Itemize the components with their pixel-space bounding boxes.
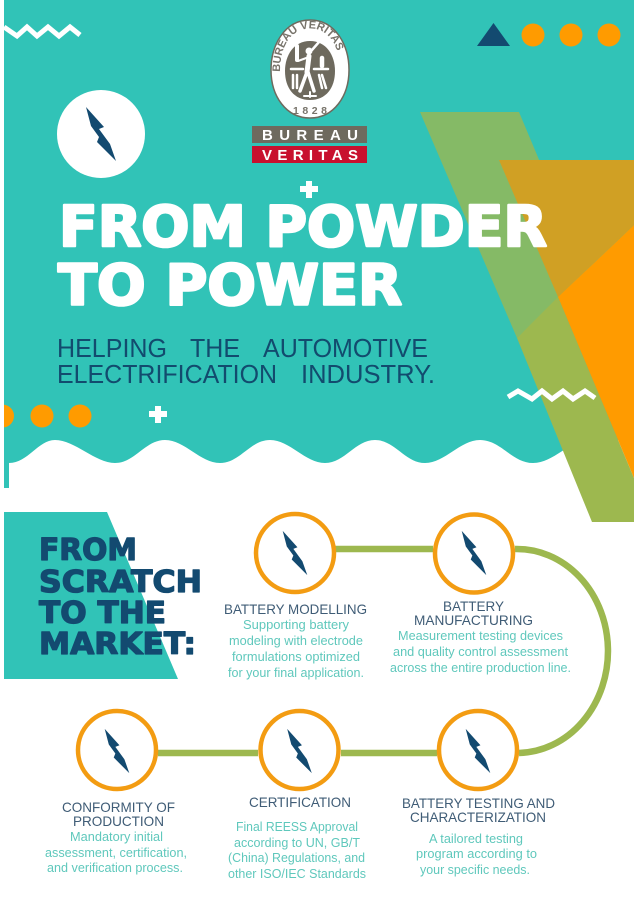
description: battery manufacturing: and quality control assessment — [393, 644, 568, 659]
subtitle — [57, 333, 435, 389]
title: TO POWER — [58, 254, 402, 318]
description: certification — [228, 819, 366, 881]
label: battery testing and characterization: CHARACTERIZATION — [410, 809, 546, 825]
label: battery testing and characterization: BATTERY TESTING AND — [402, 795, 555, 811]
step: battery testing and characterization — [402, 711, 555, 877]
description: battery testing: program according to — [416, 846, 537, 861]
logo seal — [270, 19, 350, 119]
decorative zigzag right — [508, 391, 595, 399]
icon: plus above title — [300, 181, 318, 198]
description: conformity of production: and verification process. — [47, 860, 183, 875]
logo wordmark band BUREAU: BUREAU — [262, 127, 358, 144]
description: battery manufacturing: Measurement testing devices — [398, 628, 563, 643]
title: FROM POWDER — [59, 195, 547, 260]
description: certification: according to UN, GB/T — [234, 835, 360, 850]
section heading — [39, 533, 202, 662]
label: battery manufacturing — [414, 598, 533, 628]
logo: Bureau Veritas — [252, 19, 367, 164]
icons: three orange dots top right — [522, 24, 620, 46]
logo seal: BUREAU VERITAS — [272, 20, 344, 72]
label: conformity of production: PRODUCTION — [73, 813, 164, 829]
subtitle: HELPING — [57, 333, 167, 363]
icon: navy triangle — [477, 23, 510, 46]
label: battery manufacturing: BATTERY — [443, 598, 505, 614]
description: battery manufacturing — [390, 628, 571, 675]
description: conformity of production: Mandatory initial — [70, 829, 163, 844]
icons: three orange dots left — [4, 404, 92, 428]
panel: teal hero background with wavy bottom — [4, 0, 634, 488]
subtitle: AUTOMOTIVE — [263, 333, 428, 363]
icon: bolt ring 5 — [78, 711, 156, 789]
section heading: SCRATCH — [39, 565, 202, 600]
section heading: MARKET: — [39, 627, 196, 662]
panel: section heading background — [4, 512, 178, 679]
description: battery modelling: formulations optimized — [232, 649, 360, 664]
description: certification: other ISO/IEC Standards — [228, 866, 366, 881]
description: certification: Final REESS Approval — [236, 819, 358, 834]
subtitle: INDUSTRY. — [301, 359, 435, 389]
logo wordmark band VERITAS: VERITAS — [262, 147, 358, 164]
label: conformity of production — [62, 799, 175, 829]
step: battery manufacturing — [390, 514, 571, 675]
section heading: TO THE — [39, 596, 166, 631]
label: conformity of production: CONFORMITY OF — [62, 799, 175, 815]
subtitle: THE — [190, 333, 240, 363]
description: battery modelling — [228, 617, 364, 680]
description: conformity of production — [45, 829, 187, 875]
section heading: FROM — [39, 533, 137, 568]
icon: bolt ring 1 — [256, 514, 334, 592]
label: battery modelling: BATTERY MODELLING — [224, 601, 367, 617]
description: conformity of production: assessment, certification, — [45, 845, 187, 860]
description: battery testing — [416, 831, 537, 877]
description: battery modelling: Supporting battery — [243, 617, 349, 632]
step: battery modelling — [224, 514, 367, 680]
icon: bolt ring 3 — [439, 711, 517, 789]
icon: lightning bolt in white circle — [57, 90, 145, 178]
step: certification — [228, 711, 366, 881]
icon: plus left — [149, 406, 167, 423]
icon: bolt ring 4 — [260, 711, 338, 789]
description: battery modelling: for your final application. — [228, 665, 364, 680]
description: battery modelling: modeling with electrode — [229, 633, 363, 648]
icon: bolt ring 2 — [435, 514, 513, 592]
title — [58, 195, 547, 318]
label: battery manufacturing: MANUFACTURING — [414, 612, 533, 628]
description: battery testing: A tailored testing — [429, 831, 523, 846]
description: battery testing: your specific needs. — [420, 862, 530, 877]
step: conformity of production — [45, 711, 187, 875]
label: certification: CERTIFICATION — [249, 794, 351, 810]
subtitle: ELECTRIFICATION — [57, 359, 277, 389]
decorative zigzag top left — [4, 27, 80, 36]
description: battery manufacturing: across the entire production line. — [390, 660, 571, 675]
process connector line — [158, 549, 608, 753]
background geometric shapes — [420, 112, 634, 522]
label: battery testing and characterization — [402, 795, 555, 825]
description: certification: (China) Regulations, and — [228, 850, 365, 865]
logo seal: 1828 — [293, 105, 327, 117]
